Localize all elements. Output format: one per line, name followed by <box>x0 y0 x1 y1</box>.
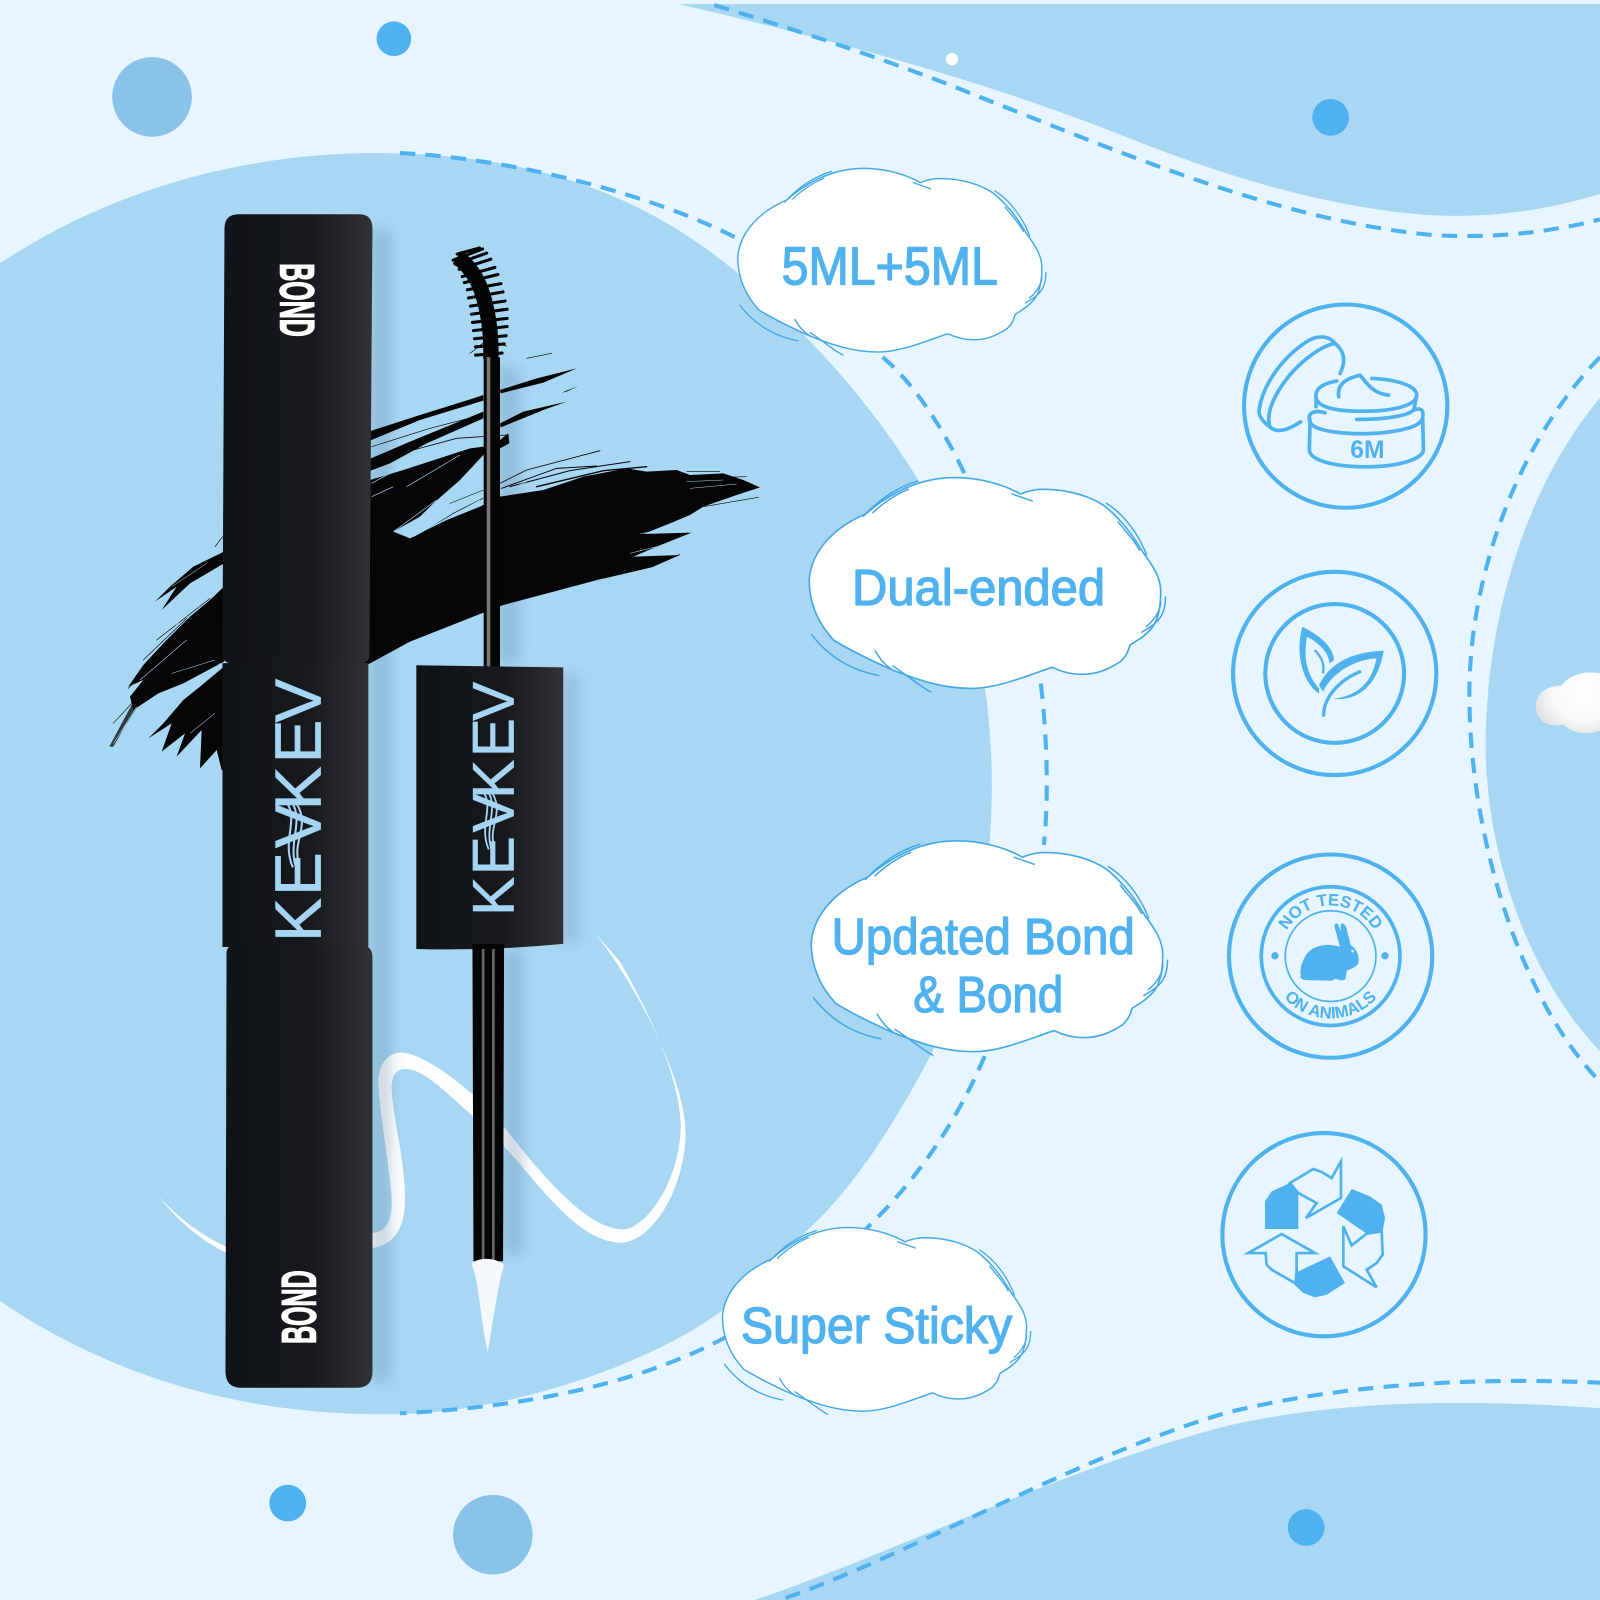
logo on cap: KEVKEV <box>461 682 526 916</box>
tube lower section <box>226 945 372 1388</box>
bond rod <box>472 944 504 1261</box>
blob: top right wave <box>679 4 1600 216</box>
stroke left of tube <box>109 537 224 770</box>
applicator cap <box>416 665 563 949</box>
callout cloud: Super Sticky: Super Sticky <box>741 1297 1013 1354</box>
icon: recycle arrows <box>1222 1133 1426 1336</box>
dashed line: right arc <box>1469 357 1600 1082</box>
mascara brush stroke <box>109 342 760 770</box>
callout cloud: 5ML+5ML <box>738 168 1046 355</box>
blob: large left circle <box>0 153 992 1414</box>
icon: cream jar 6M <box>1244 304 1447 508</box>
callout cloud: Dual-ended: Dual-ended <box>852 559 1105 616</box>
callout cloud: Updated Bond & Bond: Updated Bond <box>832 908 1135 965</box>
product: closed bond tube <box>222 214 372 1388</box>
stroke right of tube <box>357 342 760 670</box>
icon: not tested on animals stamp <box>1226 852 1434 1060</box>
icon: not tested on animals stamp: ON ANIMALS <box>1286 992 1376 1019</box>
callout cloud: 5ML+5ML: 5ML+5ML <box>782 237 998 297</box>
product shadows <box>370 230 578 1383</box>
icon: natural leaves <box>1233 572 1436 775</box>
callout cloud: Updated Bond & Bond: & Bond <box>913 966 1063 1023</box>
brush rod <box>484 357 500 667</box>
blob: right circle <box>1486 398 1600 1051</box>
product: open applicator <box>416 248 563 1352</box>
decorative dots <box>112 21 1349 1574</box>
tube upper section <box>222 214 372 663</box>
mascara spoolie brush <box>453 248 507 359</box>
label: BOND top: BOND <box>270 263 323 337</box>
callout cloud: Updated Bond & Bond <box>811 841 1167 1055</box>
icon: cream jar 6M: 6M <box>1350 437 1385 464</box>
dashed line: top right wave <box>714 5 1600 236</box>
icon: small cloud at right edge <box>1536 672 1600 733</box>
white bond swoosh <box>158 929 686 1253</box>
brand logo on tube: KEVKEV <box>261 678 334 942</box>
bond applicator tip <box>471 1259 504 1352</box>
dashed line: bottom right wave <box>786 1381 1600 1598</box>
dashed line: arc linking the clouds <box>400 153 1047 1413</box>
blob: bottom right wave <box>755 1403 1600 1600</box>
tube middle band <box>222 661 368 947</box>
label: BOND bottom: BOND <box>273 1270 326 1344</box>
callout cloud: Dual-ended <box>809 478 1165 692</box>
callout cloud: Super Sticky <box>722 1228 1031 1414</box>
icon: not tested on animals stamp: NOT TESTED <box>1278 894 1382 930</box>
